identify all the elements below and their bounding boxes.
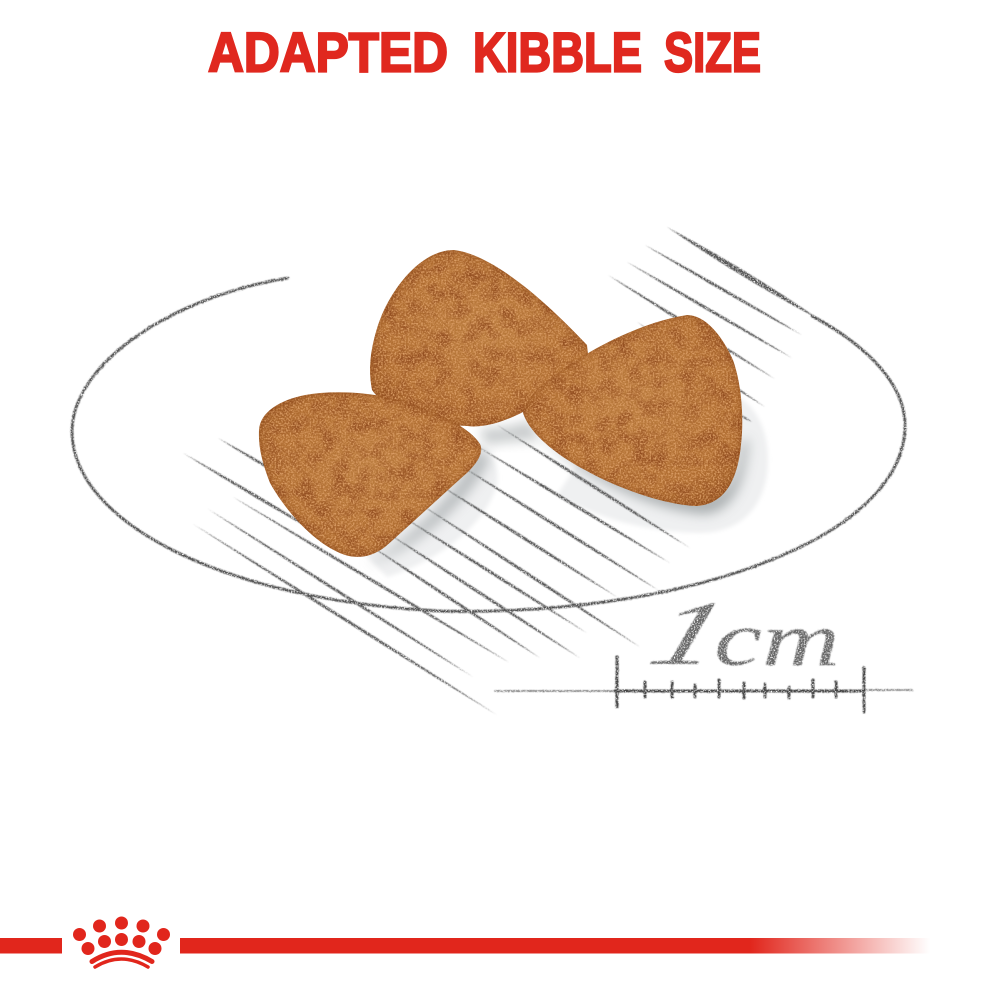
handwritten label: cm [714,598,840,682]
kibble: top [370,250,590,426]
title: ADAPTED [208,20,448,84]
title: SIZE [664,20,761,84]
lower hatching [183,425,690,715]
kibble: left [259,392,481,557]
handwritten label: 1 [638,583,739,684]
plate sketch [72,227,905,715]
handwritten label [638,583,840,684]
title [208,20,761,84]
upper hatching [608,227,820,422]
kibble: right [523,315,742,506]
ruler axis [495,690,615,692]
kibble cast glow [365,395,768,577]
scale: 1 cm ruler [495,583,912,712]
title: KIBBLE [473,20,642,84]
plate outline [72,278,905,611]
kibble shadows [365,420,748,565]
logo: crown [73,916,170,967]
footer bar [0,938,930,954]
